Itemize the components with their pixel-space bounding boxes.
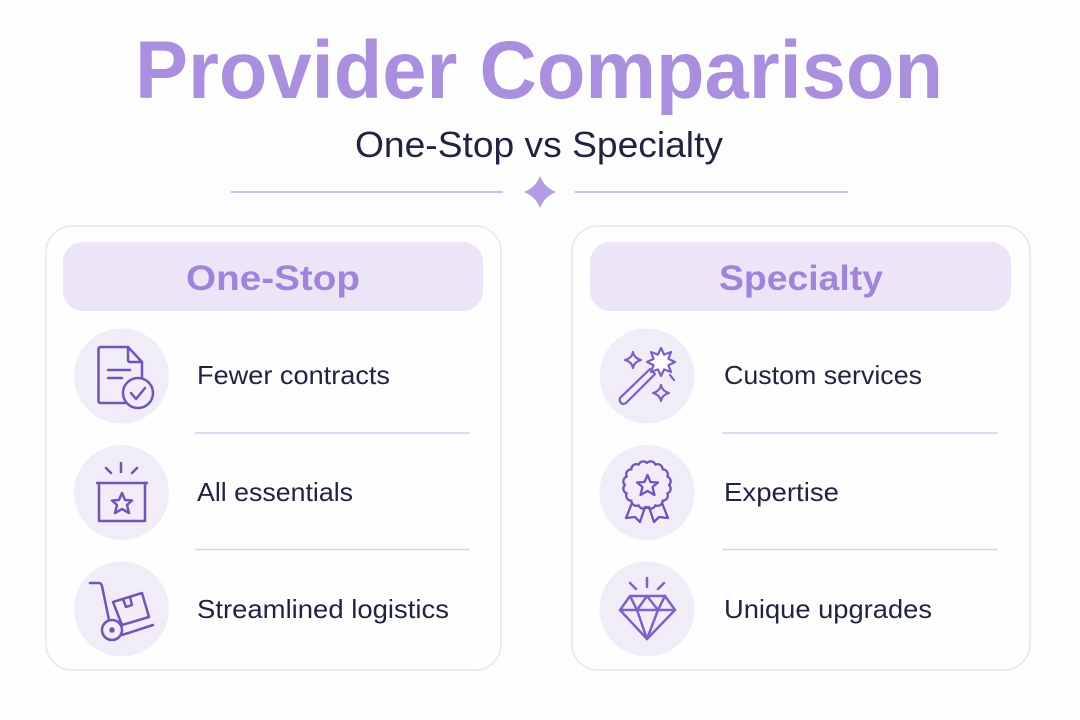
heading: One-Stop [63, 242, 483, 311]
panel: Specialty [572, 226, 1030, 670]
row: All essentials [74, 445, 353, 540]
icon: award ribbon [623, 461, 671, 522]
icon: box with star [97, 463, 147, 521]
row: Expertise [600, 445, 839, 540]
icon: diamond [620, 578, 675, 639]
subtitle: One-Stop vs Specialty [355, 124, 723, 165]
icon: magic wand [620, 348, 675, 404]
row: Fewer contracts [74, 328, 390, 424]
heading: One-Stop: One-Stop [186, 259, 360, 298]
icon: contract with check [98, 347, 153, 408]
row: Unique upgrades [600, 562, 932, 656]
heading: Specialty [590, 242, 1011, 311]
row: Custom services [600, 328, 922, 424]
icon: hand truck with package [90, 583, 153, 640]
row: Unique upgrades: Unique upgrades [724, 594, 932, 624]
panel: One-Stop [46, 226, 501, 670]
row: Streamlined logistics: Streamlined logistics [197, 594, 449, 624]
row: Fewer contracts: Fewer contracts [197, 360, 390, 390]
row: All essentials: All essentials [197, 477, 353, 507]
row: Expertise: Expertise [724, 477, 839, 507]
title: Provider Comparison [135, 25, 943, 116]
divider with sparkle [231, 176, 848, 208]
row: Streamlined logistics [74, 562, 449, 656]
row: Custom services: Custom services [724, 360, 922, 390]
heading: Specialty: Specialty [719, 259, 884, 298]
